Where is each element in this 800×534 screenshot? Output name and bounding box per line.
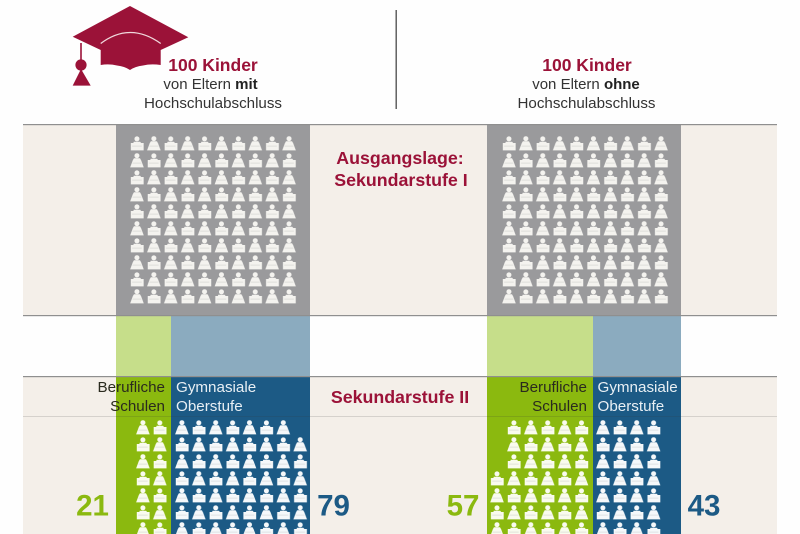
label: left Berufliche Schulen (97, 379, 165, 415)
heading: right column: Hochschulabschluss (518, 95, 656, 112)
label: right Gymnasiale Oberstufe: Oberstufe (598, 398, 664, 415)
label: left Gymnasiale Oberstufe (176, 379, 256, 415)
heading: Ausgangslage: Ausgangslage: (336, 148, 464, 168)
right column: Gymnasiale Oberstufe bar with 43 children (593, 377, 681, 534)
label: left Berufliche Schulen: Schulen (110, 398, 165, 415)
heading: left column (144, 55, 282, 112)
number: 43: 43 (688, 490, 720, 522)
label: left Gymnasiale Oberstufe: Oberstufe (176, 398, 243, 415)
heading: right column: von Eltern ohne (532, 76, 640, 93)
heading: Ausgangslage (334, 148, 468, 190)
icon: graduation cap (73, 6, 188, 86)
label: right Gymnasiale Oberstufe (598, 379, 678, 415)
left column: grey block, 100 children (116, 124, 310, 315)
heading: Sekundarstufe II: Sekundarstufe II (331, 387, 469, 407)
label: right Gymnasiale Oberstufe: Gymnasiale (598, 379, 678, 396)
heading: left column: von Eltern mit (163, 76, 258, 93)
left transition: pale green and blue (116, 315, 310, 377)
label: right Berufliche Schulen: Schulen (532, 398, 587, 415)
number: 57: 57 (447, 490, 479, 522)
number: 79: 79 (317, 490, 350, 522)
panel: Ausgangslage band (23, 124, 777, 315)
heading: right column (518, 55, 656, 112)
panel: Sekundarstufe II band (23, 377, 777, 534)
heading: left column: Hochschulabschluss (144, 95, 282, 112)
divider between columns (396, 10, 397, 109)
left column: Berufliche Schulen bar with 21 children (116, 377, 171, 534)
heading: right column: 100 Kinder (542, 55, 632, 75)
right column: grey block, 100 children (487, 124, 681, 315)
right column: Berufliche Schulen bar with 57 children (487, 377, 593, 534)
left column: Gymnasiale Oberstufe bar with 79 children (171, 377, 310, 534)
label: right Berufliche Schulen: Berufliche (519, 379, 587, 396)
heading: Ausgangslage: Sekundarstufe I (334, 170, 468, 190)
label: right Berufliche Schulen (519, 379, 587, 415)
horizontal rules (23, 124, 777, 417)
label: left Gymnasiale Oberstufe: Gymnasiale (176, 379, 256, 396)
number: 21: 21 (76, 490, 109, 522)
heading: left column: 100 Kinder (168, 55, 258, 75)
right transition: pale green and blue (487, 315, 681, 377)
label: left Berufliche Schulen: Berufliche (97, 379, 165, 396)
